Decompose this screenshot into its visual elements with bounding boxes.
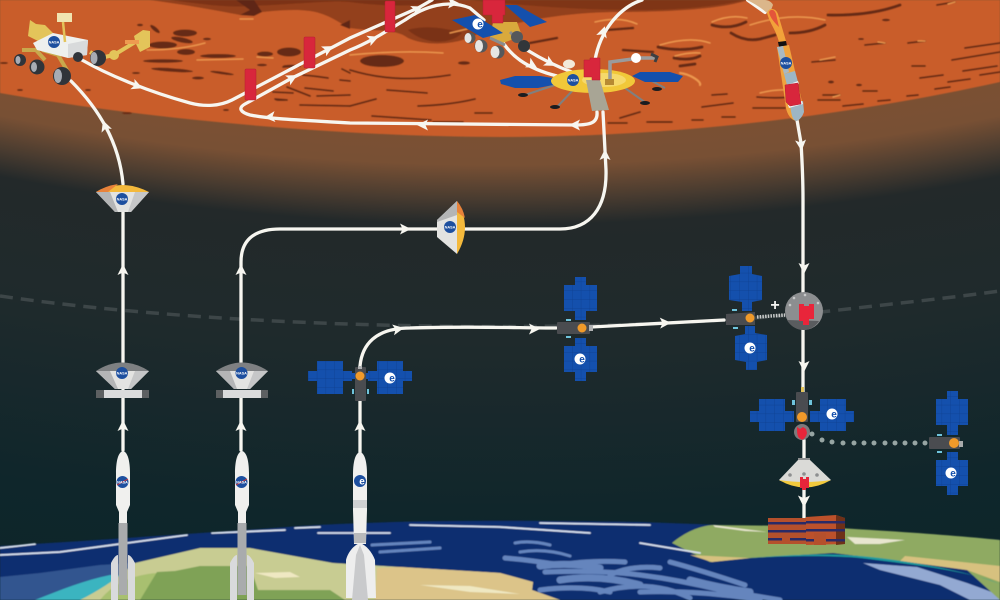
rover: Perseverance	[14, 13, 150, 85]
sample container released	[794, 424, 810, 440]
logo: ESA: e	[749, 344, 755, 354]
dotted separation trajectory	[810, 432, 928, 446]
logo: NASA	[116, 476, 128, 488]
orbiting sample container	[785, 292, 823, 330]
Earth clouds	[0, 523, 700, 555]
logo: ESA: e	[477, 20, 483, 30]
Earth left continent	[80, 548, 560, 600]
logo: NASA: NASA	[445, 226, 456, 230]
Earth surface	[0, 521, 1000, 600]
logo: ESA: e	[831, 410, 837, 420]
sample tubes	[245, 0, 801, 106]
rocket: NASA left	[111, 451, 135, 600]
logo: ESA: e	[950, 468, 956, 480]
plus sign: +	[770, 297, 780, 314]
solar-panel orbiter: departing Earth	[308, 361, 412, 401]
logo: NASA: NASA	[117, 480, 128, 484]
capsule on pedestal: centre	[216, 362, 268, 398]
Mars crater arcs	[273, 2, 1000, 123]
solar-panel orbiter: cruise	[557, 277, 597, 381]
Earth ocean swirls	[372, 542, 780, 600]
Mars light crater rims	[147, 2, 955, 97]
Mars blobs	[0, 19, 890, 114]
Mars dark hills	[150, 0, 748, 44]
logo: NASA: NASA	[117, 198, 128, 202]
Mars surface	[0, 0, 1000, 137]
trajectory lines	[71, 0, 804, 520]
ascent vehicle rocket on Mars	[747, 0, 804, 121]
solar-panel orbiter: rendezvous at Mars	[726, 266, 785, 370]
logo: ESA	[354, 475, 366, 488]
logo: ESA: e	[389, 374, 395, 384]
solar-panel orbiter: return to Earth	[750, 387, 854, 440]
rocket: ESA	[346, 452, 376, 600]
Earth left sea shallows	[0, 563, 150, 600]
curation facility building	[768, 515, 845, 545]
rover: ESA fetch rover	[452, 5, 547, 58]
orbit dashed line	[0, 291, 1000, 327]
logo: NASA: NASA	[49, 40, 60, 44]
Earth entry capsule	[779, 458, 831, 490]
logo: NASA: NASA	[236, 480, 247, 484]
rocket: NASA centre	[230, 451, 254, 600]
logo: NASA: NASA	[236, 372, 247, 376]
capsule on pedestal: left	[96, 362, 149, 398]
logo: NASA: NASA	[781, 62, 792, 66]
logo: ESA: e	[579, 354, 585, 366]
logo: NASA	[236, 476, 248, 488]
entry capsule: left	[96, 184, 149, 212]
logo: NASA: NASA	[568, 78, 579, 82]
logo: ESA: e	[359, 476, 365, 488]
entry capsule: centre, flying right	[437, 201, 465, 254]
logo: NASA	[567, 74, 579, 86]
Earth right continent	[672, 525, 1000, 600]
logo: NASA: NASA	[117, 372, 128, 376]
arrowheads on trajectories	[98, 0, 810, 508]
lander: sample retrieval lander	[500, 53, 683, 111]
solar-panel orbiter: disposal	[929, 391, 968, 495]
